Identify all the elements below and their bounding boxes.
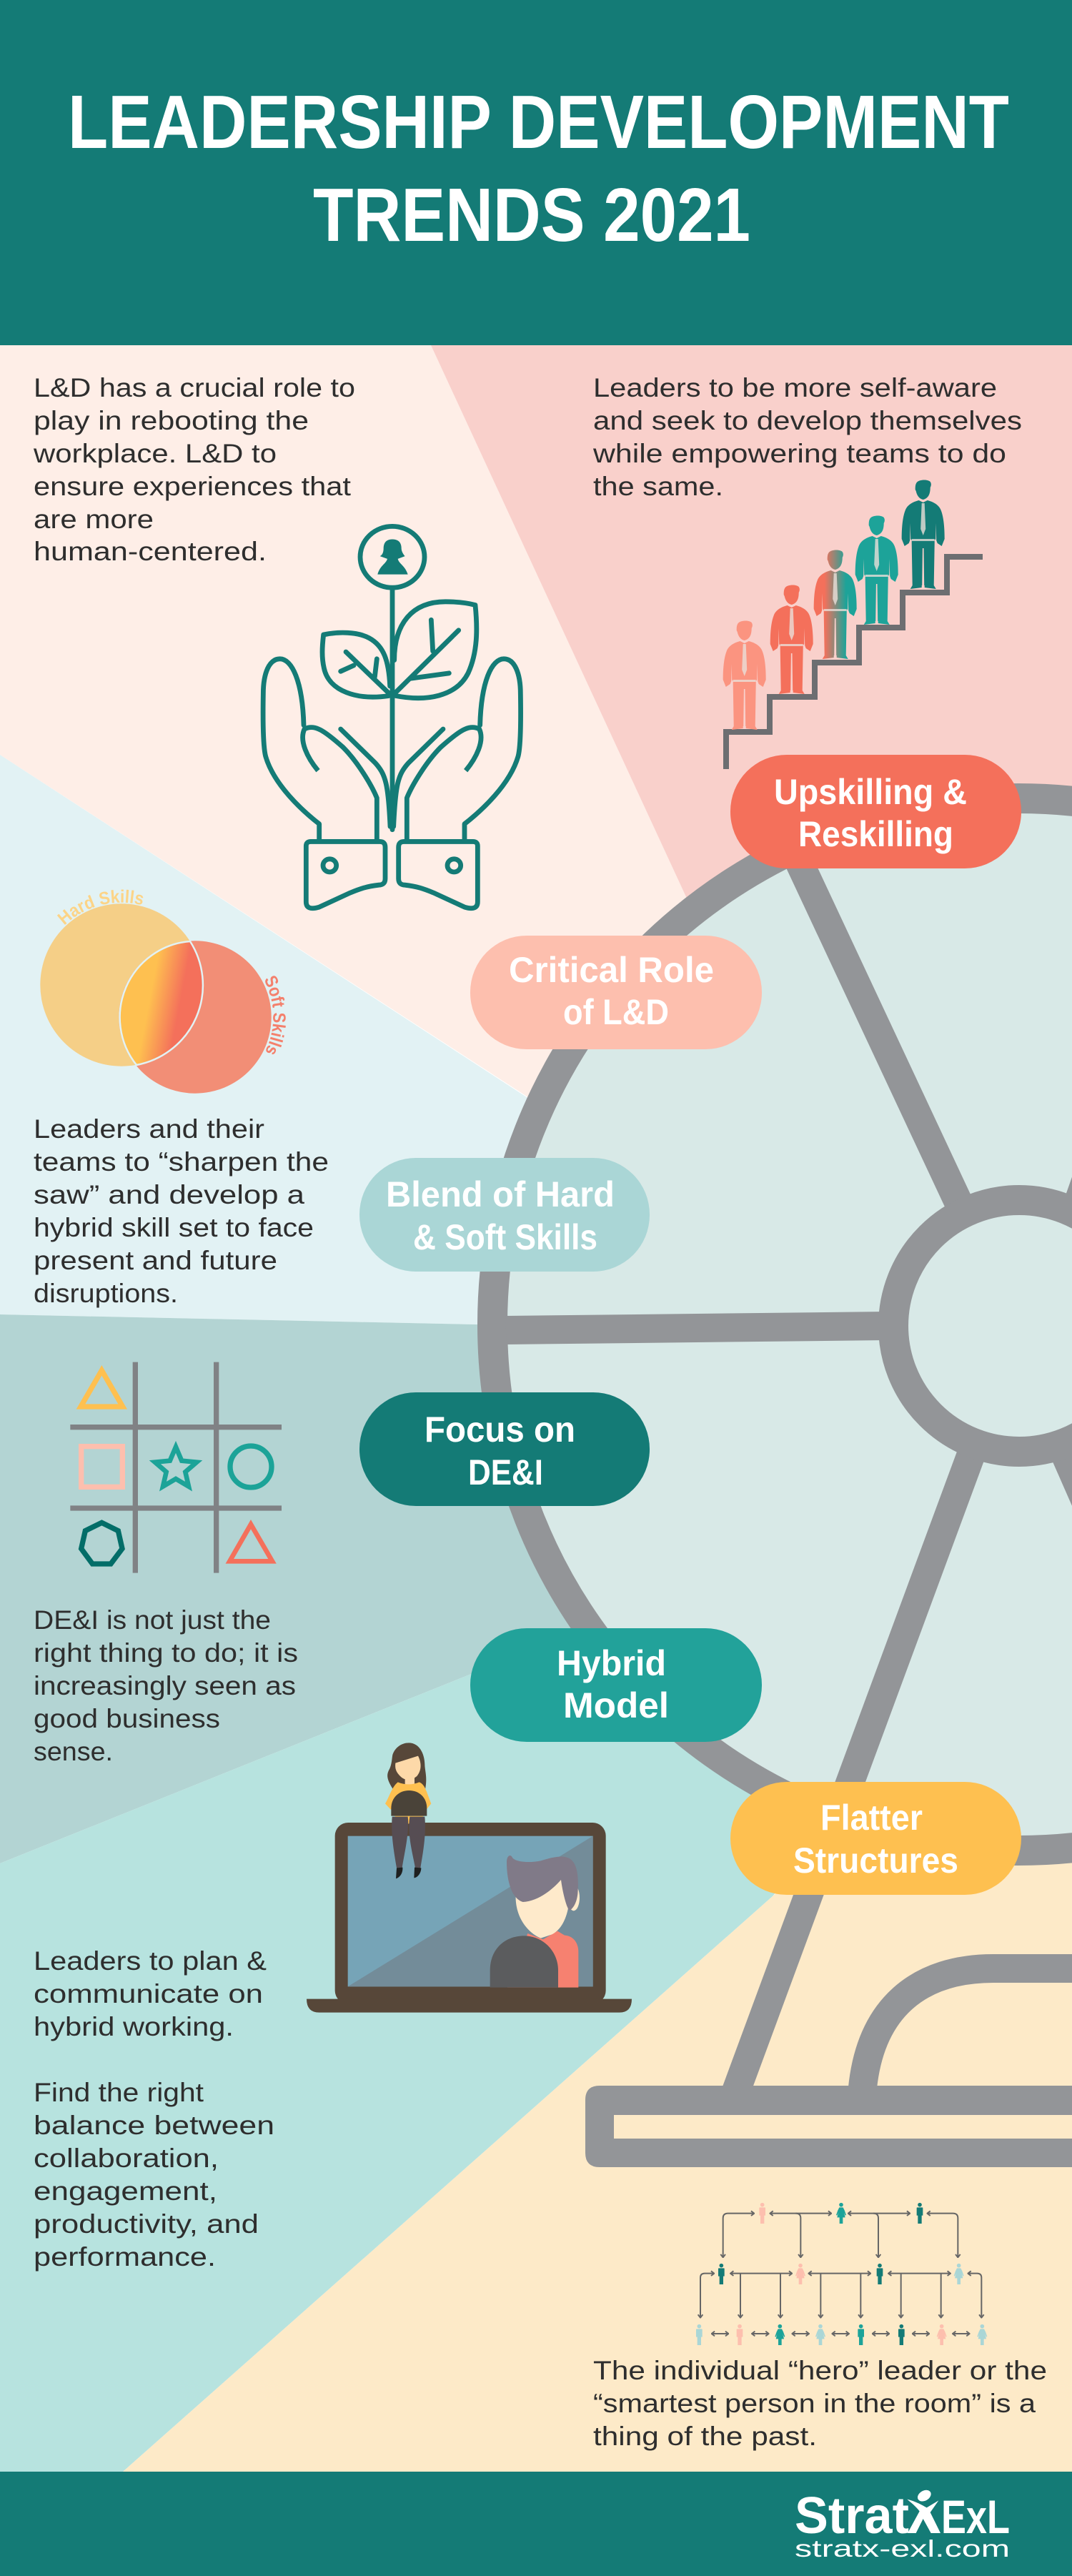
text: hybrid skill set: hybrid skill set to face bbox=[34, 1213, 314, 1242]
text: hybrid working: communicate on bbox=[34, 1979, 263, 2008]
panel: DE&I background bbox=[0, 1314, 715, 1863]
text: L&D role bbox=[33, 373, 355, 566]
panel: critical role of L&D background bbox=[0, 345, 886, 1329]
logo: StratXExL: ExL bbox=[941, 2490, 1010, 2543]
text: hybrid working: collaboration, bbox=[34, 2144, 219, 2173]
text: hybrid working: balance between bbox=[34, 2111, 274, 2140]
text: self-aware leaders: the same. bbox=[593, 472, 723, 501]
icon: tic-tac-toe grid of diverse shapes bbox=[70, 1362, 282, 1573]
text: hybrid skill set: disruptions. bbox=[34, 1279, 178, 1308]
text: DE&I: DE&I is not just the bbox=[34, 1605, 271, 1635]
text: hybrid skill set: Leaders and their bbox=[34, 1114, 264, 1144]
text: hybrid skill set bbox=[34, 1114, 329, 1308]
pill: Critical Role of L&D bbox=[470, 936, 762, 1049]
text: DE&I: sense. bbox=[34, 1737, 113, 1766]
icon: hard and soft skills venn diagram bbox=[40, 889, 286, 1094]
pill: Upskilling & Reskilling: Upskilling & bbox=[774, 772, 967, 812]
text: self-aware leaders: Leaders to be more self-aware bbox=[593, 373, 997, 402]
pill: Hybrid Model bbox=[470, 1628, 762, 1742]
text: DE&I: increasingly seen as bbox=[34, 1671, 296, 1700]
text: L&D role: workplace. L&D to bbox=[33, 439, 277, 468]
text: hybrid working bbox=[34, 1946, 274, 2272]
ferris-wheel style chair graphic bbox=[492, 798, 1072, 2167]
icon: hands holding plant with person bbox=[263, 526, 521, 908]
text: hero leader bbox=[593, 2356, 1047, 2451]
panel: hybrid model background bbox=[0, 1576, 929, 2472]
icon: hard and soft skills venn diagram: Soft Skills bbox=[265, 976, 286, 1055]
text: self-aware leaders bbox=[592, 373, 1022, 501]
pill: Upskilling & Reskilling: Reskilling bbox=[798, 814, 953, 854]
pill: Blend of Hard & Soft Skills bbox=[359, 1158, 650, 1272]
text: L&D role: play in rebooting the bbox=[34, 406, 309, 435]
pill: Flatter Structures: Flatter bbox=[820, 1798, 923, 1838]
pill: Critical Role of L&D: Critical Role bbox=[509, 950, 714, 990]
icon: flat organisation chart bbox=[696, 2203, 987, 2345]
text: hybrid working: productivity, and bbox=[34, 2209, 259, 2239]
text: hybrid working: performance. bbox=[34, 2242, 216, 2272]
text: hybrid skill set: present and future bbox=[34, 1246, 277, 1275]
pill: Focus on DE&I: DE&I bbox=[468, 1452, 543, 1492]
pill: Blend of Hard & Soft Skills: Blend of Hard bbox=[386, 1174, 615, 1214]
text: hybrid working: Leaders to plan & bbox=[34, 1946, 267, 1976]
icon: staircase with five men bbox=[723, 480, 983, 769]
text: self-aware leaders: and seek to develop themselves bbox=[593, 406, 1022, 435]
text: hybrid working: hybrid working. bbox=[34, 2012, 234, 2041]
pill: Focus on DE&I: Focus on bbox=[425, 1410, 575, 1450]
logo: StratXExL: Strat bbox=[795, 2487, 909, 2545]
text: hero leader: The individual “hero” leader or the bbox=[593, 2356, 1047, 2385]
text: L&D role: L&D has a crucial role to bbox=[34, 373, 355, 402]
text: DE&I: right thing to do; it is bbox=[34, 1638, 298, 1668]
pill: Hybrid Model: Model bbox=[563, 1685, 669, 1725]
icon: hard and soft skills venn diagram: Hard Skills bbox=[57, 889, 143, 925]
text: hybrid skill set: saw” and develop a bbox=[34, 1180, 304, 1209]
text: hero leader: “smartest person in the room” is a bbox=[593, 2389, 1036, 2418]
text: L&D role: human-centered. bbox=[34, 537, 267, 566]
pill: Critical Role of L&D: of L&D bbox=[563, 992, 669, 1032]
text: DE&I: good business bbox=[34, 1704, 220, 1733]
text: DE&I bbox=[34, 1605, 298, 1766]
panel: upskilling background bbox=[431, 345, 1072, 1329]
text: self-aware leaders: while empowering teams to do bbox=[592, 439, 1006, 468]
text: hybrid working: Find the right bbox=[34, 2078, 204, 2107]
icon: laptop with video call and seated woman bbox=[307, 1743, 632, 2013]
logo: StratXExL: stratx-exl.com bbox=[795, 2535, 1010, 2562]
text: hybrid working: engagement, bbox=[34, 2176, 217, 2206]
panel: flatter structures background bbox=[123, 1630, 1072, 2472]
text: L&D role: are more bbox=[34, 505, 154, 534]
panel: blend of skills background bbox=[0, 755, 715, 1329]
logo: StratXExL bbox=[795, 2487, 1010, 2562]
title: TRENDS 2021 bbox=[313, 173, 750, 257]
pill: Flatter Structures: Structures bbox=[793, 1841, 958, 1881]
pill: Flatter Structures bbox=[730, 1782, 1021, 1895]
footer band bbox=[0, 2472, 1072, 2576]
header band bbox=[0, 0, 1072, 345]
text: hero leader: thing of the past. bbox=[593, 2422, 817, 2451]
title bbox=[68, 80, 1009, 257]
pill: Blend of Hard & Soft Skills: & Soft Skills bbox=[413, 1217, 597, 1257]
pill: Focus on DE&I bbox=[359, 1392, 650, 1506]
pill: Hybrid Model: Hybrid bbox=[557, 1643, 666, 1683]
text: L&D role: ensure experiences that bbox=[34, 472, 352, 501]
text: hybrid skill set: teams to “sharpen the bbox=[34, 1147, 329, 1176]
pill: Upskilling & Reskilling bbox=[730, 755, 1021, 868]
